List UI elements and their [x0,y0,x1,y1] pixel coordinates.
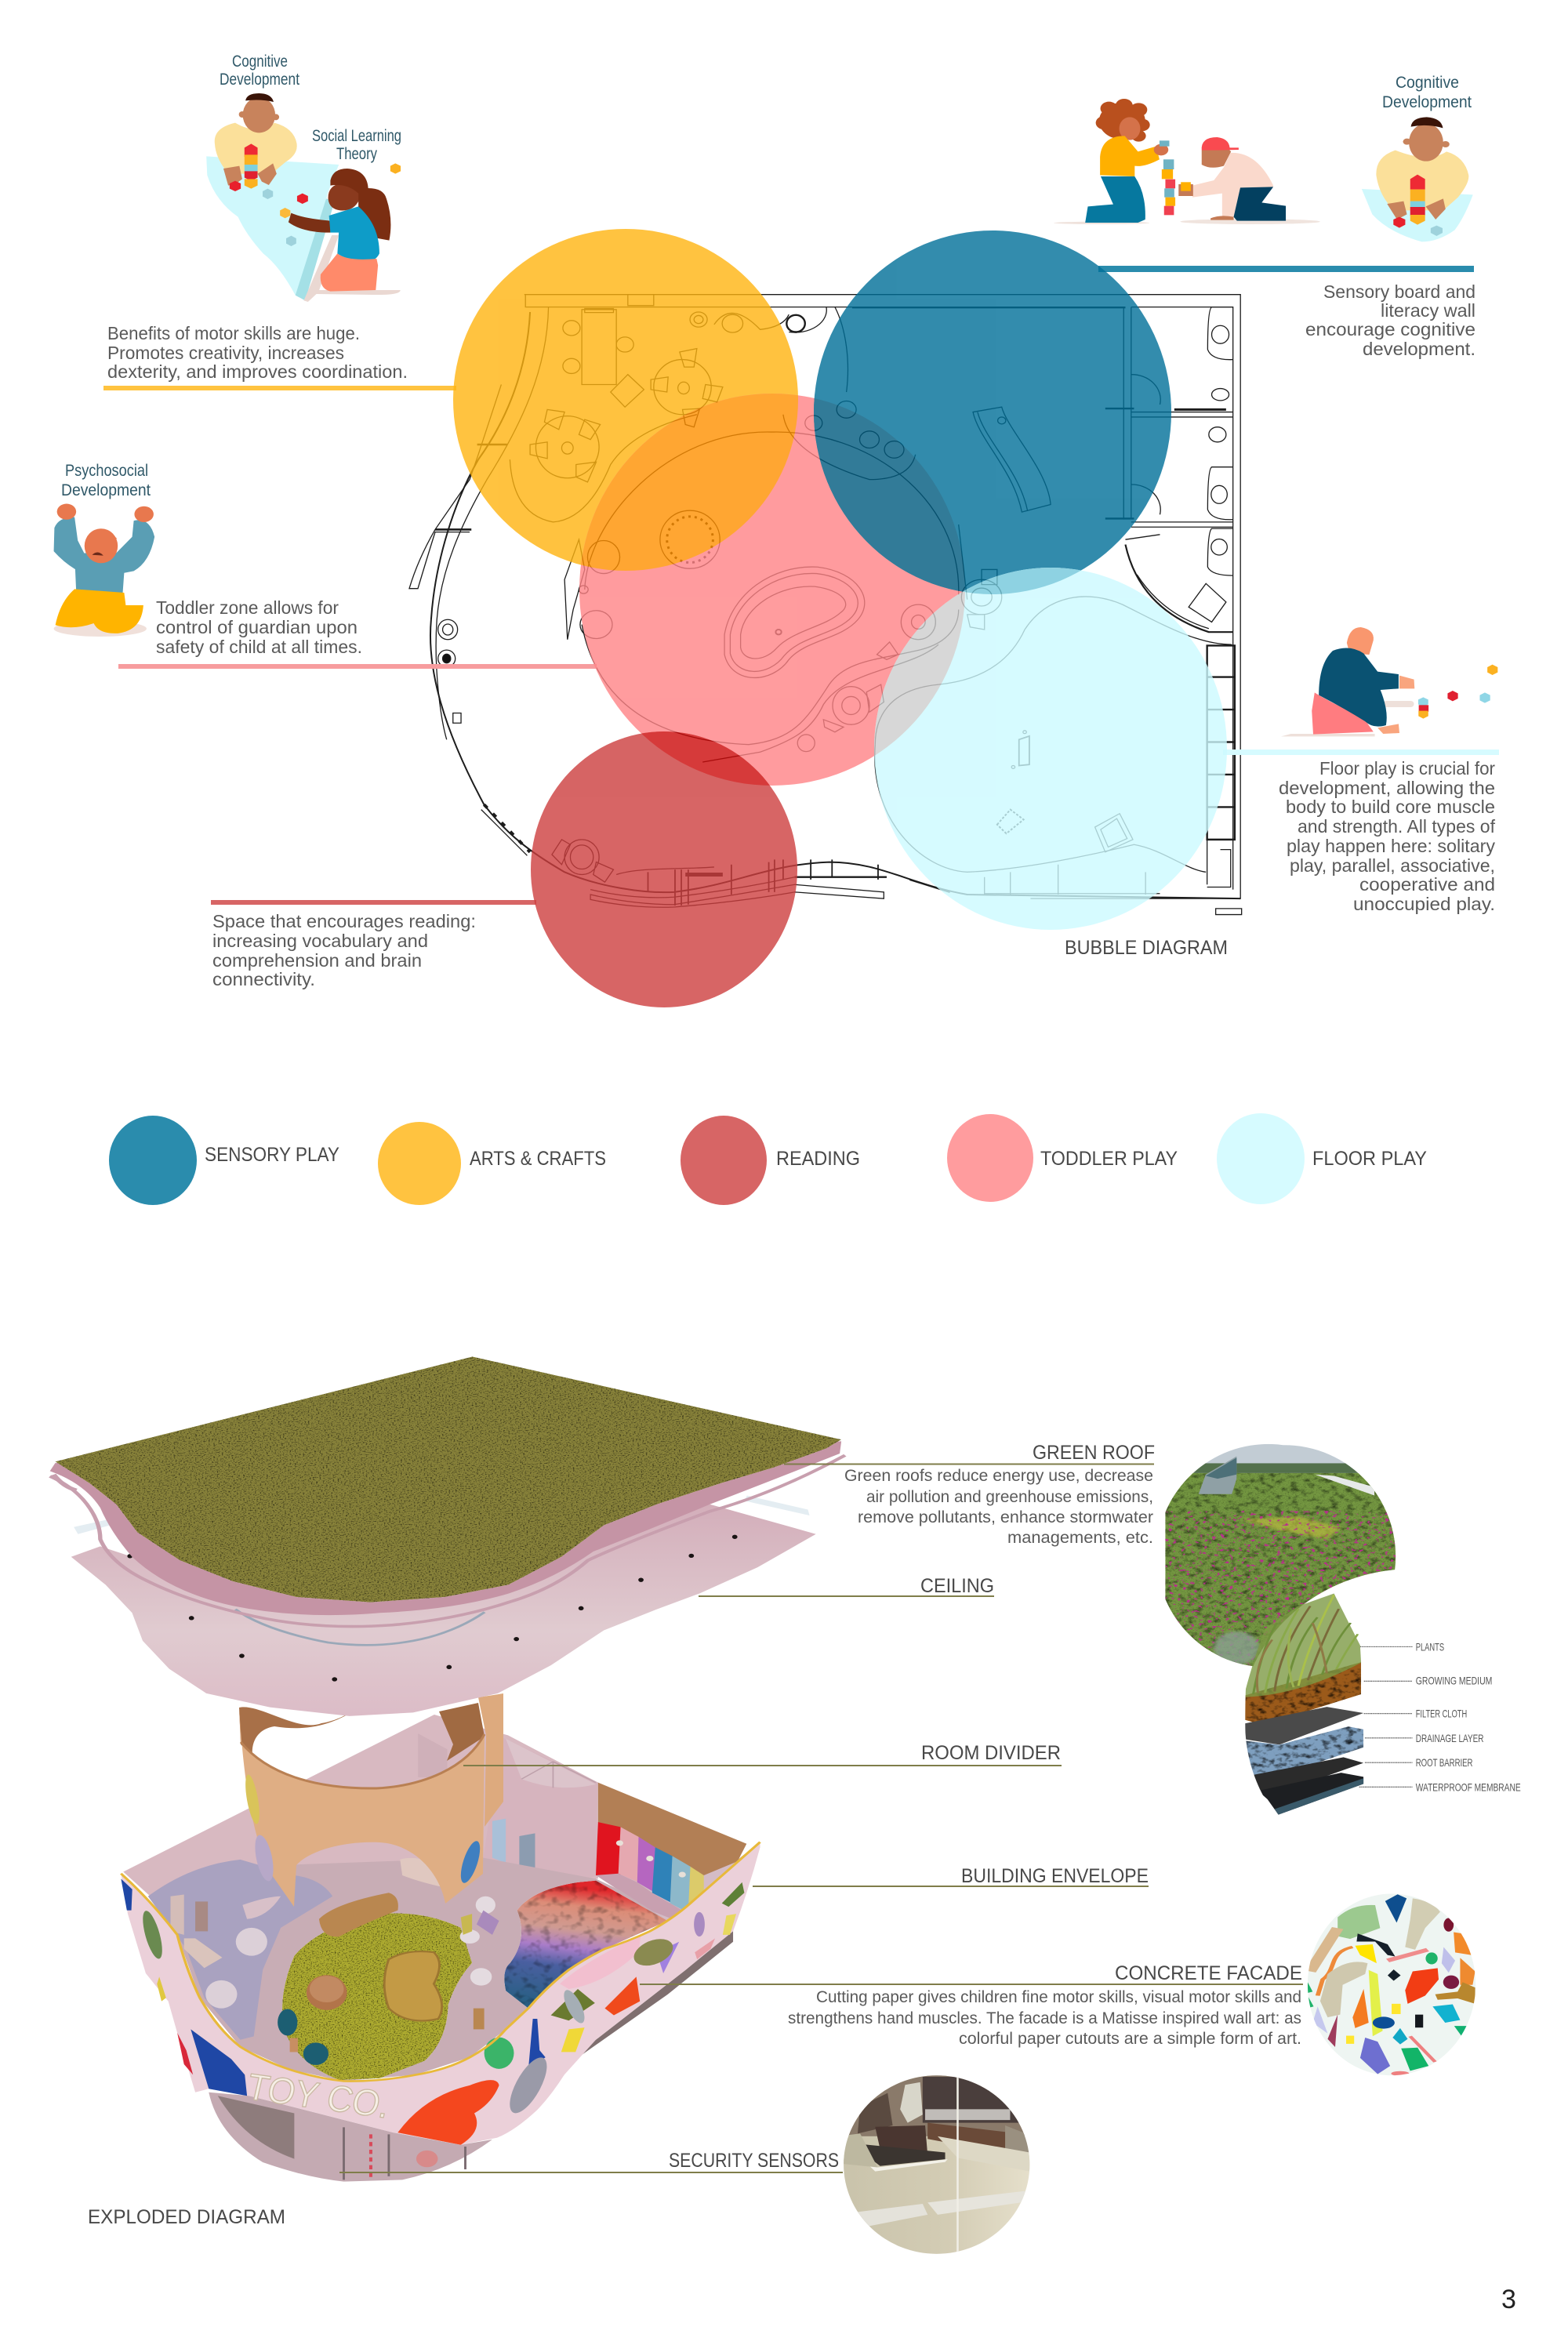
illustration: children stacking blocks (right) [1054,99,1473,241]
layer labels [1359,1642,1521,1794]
legend item: arts and crafts [378,1122,606,1205]
building: yellow parapet rim [121,1842,760,2082]
caption: cognitive development left [220,53,299,89]
building: floor [151,1858,668,2081]
overlap: arts and toddler [581,394,798,571]
text: floor play [1279,758,1496,914]
text: toddler zone: Toddler zone allows for [156,597,339,618]
caption: cognitive development left: Cognitive [232,53,288,71]
bubble: arts & crafts [453,229,798,571]
roof edge [50,1441,841,1615]
caption: cognitive development left: Development [220,71,299,89]
text: floor play: unoccupied play. [1353,894,1495,914]
text: motor skills: Promotes creativity, increases [107,343,344,363]
caption: cognitive development right [1382,74,1472,111]
caption: psychosocial development: Psychosocial [65,462,148,480]
photo: green roof [1165,1441,1403,1676]
text: concrete facade description: Cutting paper gives children fine motor skills, visual motor skills and [816,1988,1301,2006]
overlap: floor and sensory [963,568,1081,594]
caption: bubble diagram: BUBBLE DIAGRAM [1065,937,1228,959]
ceiling sensors [127,1535,738,1682]
illustration: child on floor throwing blocks [1281,627,1497,736]
illustration: two children with blocks (left) [206,93,401,302]
bubble: sensory play [814,230,1171,594]
building: inner side wall [596,1842,760,1922]
text: toddler zone: control of guardian upon [156,617,358,637]
text: motor skills: dexterity, and improves coordination. [107,361,408,382]
text: sensory board: development. [1363,339,1475,359]
caption: cognitive development right: Development [1382,93,1472,111]
building: kidney play table [384,1951,442,2021]
caption: psychosocial development [61,462,151,499]
legend item: reading: READING [776,1148,860,1170]
skylight ring [235,1610,485,1645]
text: floor play: play happen here: solitary [1287,836,1496,856]
building: green rug [282,1913,472,2080]
exploded diagram: building level [121,1715,760,2182]
building: toy co signage: TOY CO. [243,2067,394,2126]
building: doors [492,1819,506,1863]
text: green roof description: remove pollutants, enhance stormwater [858,1508,1153,1526]
building: colourful wall [596,1783,746,1919]
building: lower glass level [209,1929,733,2182]
floor plan drawing [409,295,1242,915]
label: ceiling: CEILING [920,1575,994,1597]
leader lines: bubbles [103,266,1499,905]
section: green roof layers [1243,1593,1363,1815]
facade art circle [1303,1893,1483,2077]
label: building envelope: BUILDING ENVELOPE [961,1865,1149,1887]
building: furniture [170,1858,499,2065]
text: green roof description: Green roofs reduce energy use, decrease [844,1467,1153,1485]
caption: cognitive development right: Cognitive [1396,74,1459,92]
overlap: sensory and toddler [814,398,965,592]
legend item: sensory play: SENSORY PLAY [205,1144,339,1166]
bubble: toddler play [579,394,965,786]
text: concrete facade description: strengthens hand muscles. The facade is a Matisse inspired wall art: as [788,2009,1301,2027]
text: floor play: and strength. All types of [1298,816,1496,837]
building: facade band [121,1842,760,2145]
ceiling panel [71,1504,816,1716]
caption: social learning theory: Theory [336,145,377,163]
caption: psychosocial development: Development [61,481,151,499]
caption: social learning theory [312,127,401,163]
coloured bubbles [453,229,1227,1007]
photos: facade art and security sensors [837,1893,1483,2256]
caption: exploded diagram: EXPLODED DIAGRAM [88,2206,285,2228]
text: reading: comprehension and brain [212,950,422,971]
label: security sensors: SECURITY SENSORS [669,2150,839,2172]
caption: social learning theory: Social Learning [312,127,401,145]
text: reading: Space that encourages reading: [212,911,476,931]
legend [109,1113,1427,1205]
text: concrete facade description [788,1988,1301,2048]
layer labels: PLANTS [1416,1642,1444,1653]
text: floor play: cooperative and [1359,874,1495,895]
building: facade cutouts [121,1878,744,2145]
green roof photos and section [1165,1441,1521,1815]
legend item: arts and crafts: ARTS & CRAFTS [470,1148,606,1170]
layer labels: FILTER CLOTH [1416,1708,1467,1720]
text: reading: connectivity. [212,969,315,989]
bubble: floor play [874,568,1227,930]
panel: bubble diagram [103,229,1499,1007]
label: green roof: GREEN ROOF [1033,1442,1155,1464]
page number: 3 [1501,2285,1516,2314]
roof rim [50,1455,845,1627]
text: sensory board: Sensory board and [1323,281,1475,302]
text: concrete facade description: colorful paper cutouts are a simple form of art. [959,2030,1301,2048]
building: painted mural floor [504,1881,668,2009]
text: reading: increasing vocabulary and [212,931,428,951]
roof support strips [74,1496,810,1534]
text: sensory board: encourage cognitive [1305,319,1475,339]
text: green roof description: air pollution and greenhouse emissions, [866,1488,1153,1506]
label: concrete facade: CONCRETE FACADE [1115,1962,1302,1984]
text: motor skills: Benefits of motor skills are huge. [107,323,360,343]
legend item: toddler play: TODDLER PLAY [1040,1148,1178,1170]
text: toddler zone [156,597,362,657]
legend item: floor play: FLOOR PLAY [1312,1148,1427,1170]
text: toddler zone: safety of child at all times. [156,637,362,657]
legend item: floor play [1217,1113,1427,1204]
security sensors photo circle [837,2074,1038,2256]
bubble: reading [531,731,797,1007]
text: floor play: play, parallel, associative, [1290,855,1495,876]
legend item: reading [681,1116,860,1205]
layer labels: ROOT BARRIER [1416,1757,1472,1769]
exploded diagram: ceiling and roof [50,1356,845,1716]
legend item: toddler play [947,1114,1178,1202]
overlap: floor and toddler [874,590,965,756]
text: motor skills [107,323,408,382]
building: purple floor zone [148,1860,332,2040]
text: green roof description: managements, etc. [1007,1529,1153,1547]
text: floor play: Floor play is crucial for [1319,758,1495,779]
green roof surface [55,1356,841,1602]
text: sensory board [1305,281,1475,359]
building: back walls [123,1715,598,1896]
illustration: crying toddler [54,504,154,637]
text: floor play: body to build core muscle [1286,797,1495,817]
text: sensory board: literacy wall [1381,300,1475,321]
text: reading [212,911,476,989]
overlap: reading and toddler [641,731,770,786]
text: floor play: development, allowing the [1279,778,1495,798]
legend item: sensory play [109,1116,339,1205]
exploded diagram: room divider [239,1693,503,1907]
label: room divider: ROOM DIVIDER [921,1742,1061,1764]
text: green roof description [844,1467,1153,1547]
